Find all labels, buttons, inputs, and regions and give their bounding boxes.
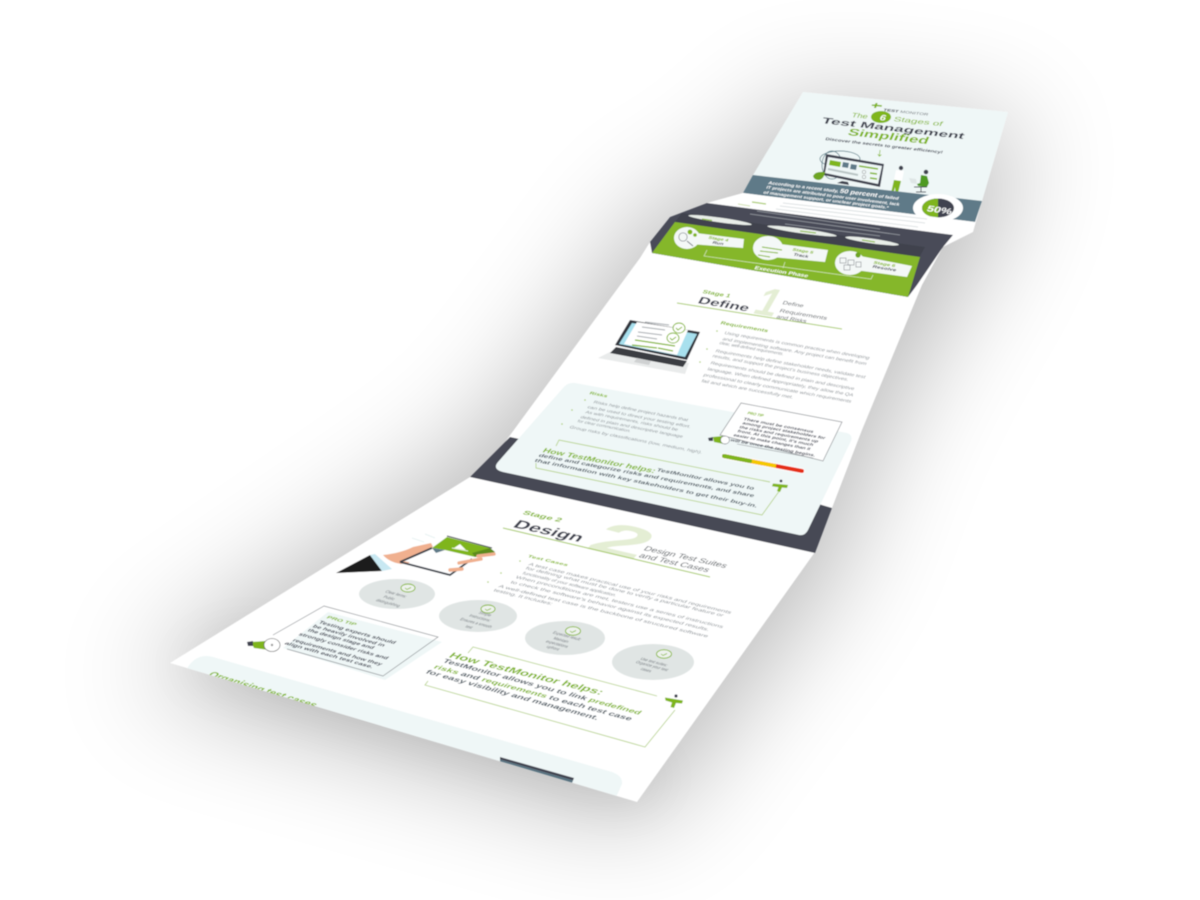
title: Test Management [820,115,966,141]
callout: how TestMonitor helps 2: for easy visibility and management. [423,669,601,721]
requirements text: results, and support the project's business objectives. [711,353,850,382]
callout: how TestMonitor helps 2: risks and requirements to each test case [431,664,634,722]
risks text: for clear communication. [576,419,632,433]
title: 6 [878,113,888,123]
test cases text: for defining what must be done to verify a particular feature or [524,566,726,618]
arrow [878,150,881,156]
page sheet [170,92,1008,802]
panel: header [753,92,1008,201]
requirements text: Requirements should be defined in plain and descriptive [709,360,856,391]
risks text: can be used to direct your testing effort. [586,405,692,429]
callout: how TestMonitor helps 1: TestMonitor allows you to [655,468,756,492]
requirements text: Requirements [719,320,770,334]
stage 6 resolve: Stage 6 [872,260,898,268]
item: use test suites: Use test suites: [639,657,669,667]
callout: how TestMonitor helps 2 [423,647,683,747]
icon: laptop checklist [598,320,700,374]
risks text: Risks [588,391,610,399]
stage 1 subtitle: and Risks [775,314,808,325]
test cases text: Test Cases [526,554,571,567]
requirements text: clear, well-defined requirements. [718,340,785,356]
callout: pro tip 2: requirements and how they [290,638,384,667]
icon: plus logo [772,480,788,492]
callout: pro tip 1: PRO TIP [746,411,765,418]
requirements text [699,320,872,404]
dark tab [500,757,574,783]
requirements text: Requirements help define stakeholder needs, validate test [714,348,868,379]
requirements text: professional to clearly communicate which requirements [702,372,854,404]
callout: pro tip 1: front. At this point, it's much [736,429,816,447]
callout: how TestMonitor helps 1: that information with key stakeholders to get their buy-in. [533,458,760,509]
chart: 50 percent donut [913,194,963,222]
callout: pro tip 1: the risks and requirements up [738,425,821,444]
title [820,111,966,147]
stage 1 heading [695,289,752,314]
item: simple instructions: Instructions: [468,613,493,623]
stage 6 resolve: Resolve [871,264,899,273]
stage 1 heading: Define [695,296,752,314]
title: The [850,112,869,121]
test cases text: functionality of your software application. [521,571,618,597]
item: use test suites: Organize your test [634,660,671,672]
requirements text: Using requirements is common practice when developing [723,330,872,360]
dark fold [650,203,953,297]
panel: execution phase [650,203,953,297]
stage 2 subtitle [637,544,730,574]
stage 1 subtitle: Requirements [778,308,829,322]
callout: pro tip 2 [273,606,442,680]
stage 2 heading [510,510,588,544]
test cases text [487,554,734,639]
logo: TestMonitor [872,103,929,117]
green band [652,222,920,297]
test cases text: to check the software's behavior against its expected results. [509,580,711,632]
test cases text: A well-defined test case is the backbone of structured software [497,584,711,639]
callout: how TestMonitor helps 2: TestMonitor allows you to link predefined [440,658,643,716]
chart: 50 percent donut: 50% [925,204,955,216]
callout: how TestMonitor helps 1: How TestMonitor helps: [541,446,658,475]
panel: statistic band [743,175,982,222]
item: clear items: Public [382,595,397,601]
item: clear items: distinguishing [375,598,402,608]
bracket [704,250,873,279]
stage 4 run: Stage 4 [708,235,731,243]
callout: pro tip 1: will be once the testing begins. [728,437,817,458]
stage 2 subtitle: Design Test Suites [642,544,730,570]
item: use test suites: cases [639,667,654,673]
stage 5 track: Stage 5 [792,247,816,255]
item: simple instructions: test [464,624,475,630]
stage 6 resolve [835,251,912,277]
callout: how TestMonitor helps 1 [533,440,788,515]
risks text: Group risks by classifications (low, medium, high). [568,425,704,455]
icon: megaphone 1 [708,436,730,444]
callout: pro tip 2: strongly consider risks and [296,632,390,661]
stage 5 track [753,236,828,262]
execution phase label: Execution Phase [753,265,810,279]
dark band [470,437,832,553]
callout: pro tip 2: be heavily involved in [310,624,387,648]
stage 5 track: Track [793,252,811,259]
requirements text: language. When defined appropriately, they allow the QA [706,366,855,397]
panel: folded white strip [707,193,975,235]
item: simple instructions [439,600,517,632]
folded stage labels [688,213,899,247]
stage 4 run [674,227,744,249]
stage 2 heading: Stage 2 [521,510,564,524]
item: expected result [525,621,605,655]
risks text: Risks help define project hazards that [592,400,691,422]
test cases text: testing. It includes: [492,588,554,606]
title: Simplified [846,127,931,147]
big number 1: 1 [746,280,792,325]
panel: stage 2 design [185,510,734,806]
callout: pro tip 2: PRO TIP [325,615,358,626]
callout: pro tip 1: easier to make changes than it [732,433,813,451]
requirements text: fail and which are successfully met. [700,378,795,400]
panel: statistic band: IT projects are attributed to poor user involvement, lack [766,185,901,207]
panel: stage 1 define [598,280,872,404]
panel: organising test cases: Organising test cases [204,671,321,710]
stage 2 subtitle: and Test Cases [637,551,713,574]
panel: statistic band: According to a recent study, 50 percent of failed [767,179,901,202]
item: simple instructions: Ensures a smooth [459,617,494,629]
panel: organising test cases [185,656,622,806]
requirements text: and implementing software. Any project can benefit from [721,336,868,366]
illustration: hand holding tablet [336,534,495,575]
item: expected result: expectations [544,639,571,649]
icon: plus logo 2 [665,694,683,708]
item: expected result: Expected result: [551,630,583,641]
stage 1 subtitle: Define [781,300,805,309]
risks text: As with requirements, risks should be [584,410,680,432]
callout: pro tip 1: There must be consensus [742,417,816,434]
stage 4 run: Run [712,240,726,246]
item: use test suites [612,644,694,680]
test cases text: A test case makes practical use of your risks and requirements [527,562,734,615]
callout: how TestMonitor helps 1: define and categorize risks and requirements, and share [537,453,756,499]
callout: pro tip 2: the design stage and [305,628,376,651]
panel: statistic band: of management support, or unclear project goals.* [763,190,890,210]
chart: risk gauge [724,456,802,471]
item: clear items [359,579,435,609]
logo: TestMonitor: TEST MONITOR [883,108,929,117]
drop shadow [135,100,1022,825]
callout: how TestMonitor helps 2: How TestMonitor helps: [446,651,607,696]
illustration: monitor and people [813,151,929,193]
big number 2: 2 [576,513,669,569]
callout: pro tip 1 [720,403,842,461]
title: Stages of [892,116,944,128]
item: expected result: Maintain [552,636,571,644]
stage 2 heading: Design [510,518,588,544]
icon: megaphone 2 [247,638,280,652]
panel: risks [496,383,852,535]
callout: pro tip 2: align with each test case. [282,641,376,670]
risks text [561,391,704,455]
test cases text: When preconditions are met, testers use a series of instructions [514,575,726,629]
item: simple instructions: Simple [477,610,494,617]
item: expected result: upfront [545,644,562,652]
risks text: defined in plain and descriptive language [579,415,685,439]
stage 1 subtitle [775,300,829,325]
callout: pro tip 2: Testing experts should [316,620,397,646]
subtitle: Discover the secrets to greater efficiency! [825,136,944,154]
stage 1 heading: Stage 1 [701,289,732,299]
callout: pro tip 1: among project stakeholders for [741,421,827,440]
item: clear items: Clear items: [384,589,408,598]
